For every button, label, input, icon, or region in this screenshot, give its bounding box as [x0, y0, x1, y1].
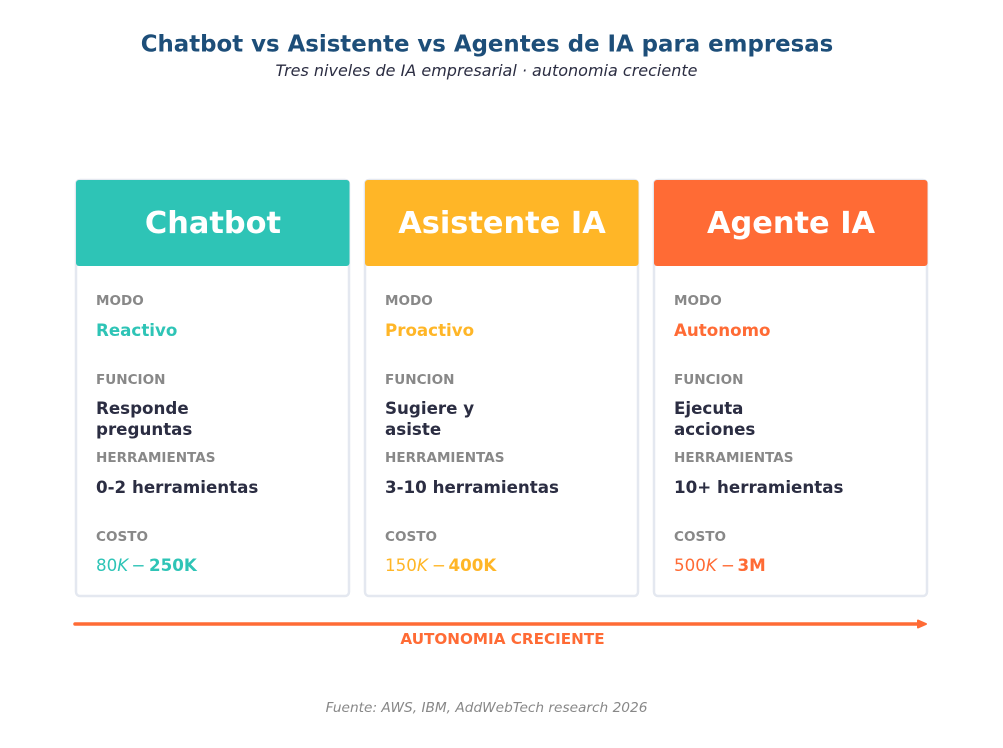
agente costo: − — [721, 555, 735, 575]
agente funcion: FUNCION — [674, 372, 743, 388]
chatbot modo: MODO — [96, 293, 144, 309]
chatbot header: Chatbot — [145, 206, 281, 241]
panel: asistente — [365, 180, 638, 596]
agente herramientas: HERRAMIENTAS — [674, 450, 793, 466]
chatbot modo: Reactivo — [96, 320, 177, 340]
chatbot costo: 250K — [149, 555, 198, 575]
arrow label: AUTONOMIA CRECIENTE — [400, 630, 605, 648]
chatbot funcion — [96, 372, 192, 439]
chatbot herramientas: HERRAMIENTAS — [96, 450, 215, 466]
arrow: autonomia — [75, 620, 926, 628]
asistente header: Asistente IA — [398, 206, 606, 241]
panel: chatbot — [76, 180, 350, 596]
asistente herramientas: 3-10 herramientas — [385, 477, 559, 497]
agente funcion: Ejecuta — [674, 398, 743, 418]
asistente funcion: FUNCION — [385, 372, 454, 388]
agente costo: K — [706, 555, 719, 575]
chatbot herramientas — [96, 450, 258, 497]
agente header: Agente IA — [707, 206, 876, 241]
chatbot costo: K — [117, 555, 130, 575]
chatbot funcion: preguntas — [96, 419, 192, 439]
asistente header — [365, 180, 638, 266]
agente header — [654, 180, 928, 266]
asistente costo: K — [417, 555, 430, 575]
chatbot header — [76, 180, 350, 266]
title: Chatbot vs Asistente vs Agentes de IA para empresas — [141, 32, 833, 58]
agente herramientas — [674, 450, 843, 497]
panel: agente — [654, 180, 928, 596]
agente modo: Autonomo — [674, 320, 770, 340]
agente costo: 500 — [674, 555, 706, 575]
chatbot herramientas: 0-2 herramientas — [96, 477, 258, 497]
asistente costo: 150 — [385, 555, 417, 575]
asistente costo — [385, 529, 497, 575]
asistente costo: − — [432, 555, 446, 575]
asistente herramientas: HERRAMIENTAS — [385, 450, 504, 466]
asistente modo — [385, 293, 474, 340]
agente funcion: acciones — [674, 419, 755, 439]
asistente herramientas — [385, 450, 559, 497]
chatbot costo: 80 — [96, 555, 117, 575]
chatbot costo: − — [132, 555, 145, 575]
agente modo: MODO — [674, 293, 722, 309]
subtitle: Tres niveles de IA empresarial · autonomia creciente — [276, 61, 698, 80]
agente herramientas: 10+ herramientas — [674, 477, 843, 497]
chatbot costo — [96, 529, 198, 575]
agente costo: 3M — [738, 555, 766, 575]
agente funcion — [674, 372, 755, 439]
asistente funcion: asiste — [385, 419, 441, 439]
agente modo — [674, 293, 770, 340]
source note: Fuente: AWS, IBM, AddWebTech research 2026 — [326, 700, 648, 716]
chatbot funcion: FUNCION — [96, 372, 165, 388]
asistente modo: MODO — [385, 293, 433, 309]
agente costo — [674, 529, 766, 575]
asistente modo: Proactivo — [385, 320, 474, 340]
chatbot modo — [96, 293, 177, 340]
agente costo: COSTO — [674, 529, 726, 545]
asistente costo: 400K — [448, 555, 497, 575]
chatbot costo: COSTO — [96, 529, 148, 545]
asistente funcion — [385, 372, 474, 439]
chatbot funcion: Responde — [96, 398, 189, 418]
asistente funcion: Sugiere y — [385, 398, 474, 418]
asistente costo: COSTO — [385, 529, 437, 545]
